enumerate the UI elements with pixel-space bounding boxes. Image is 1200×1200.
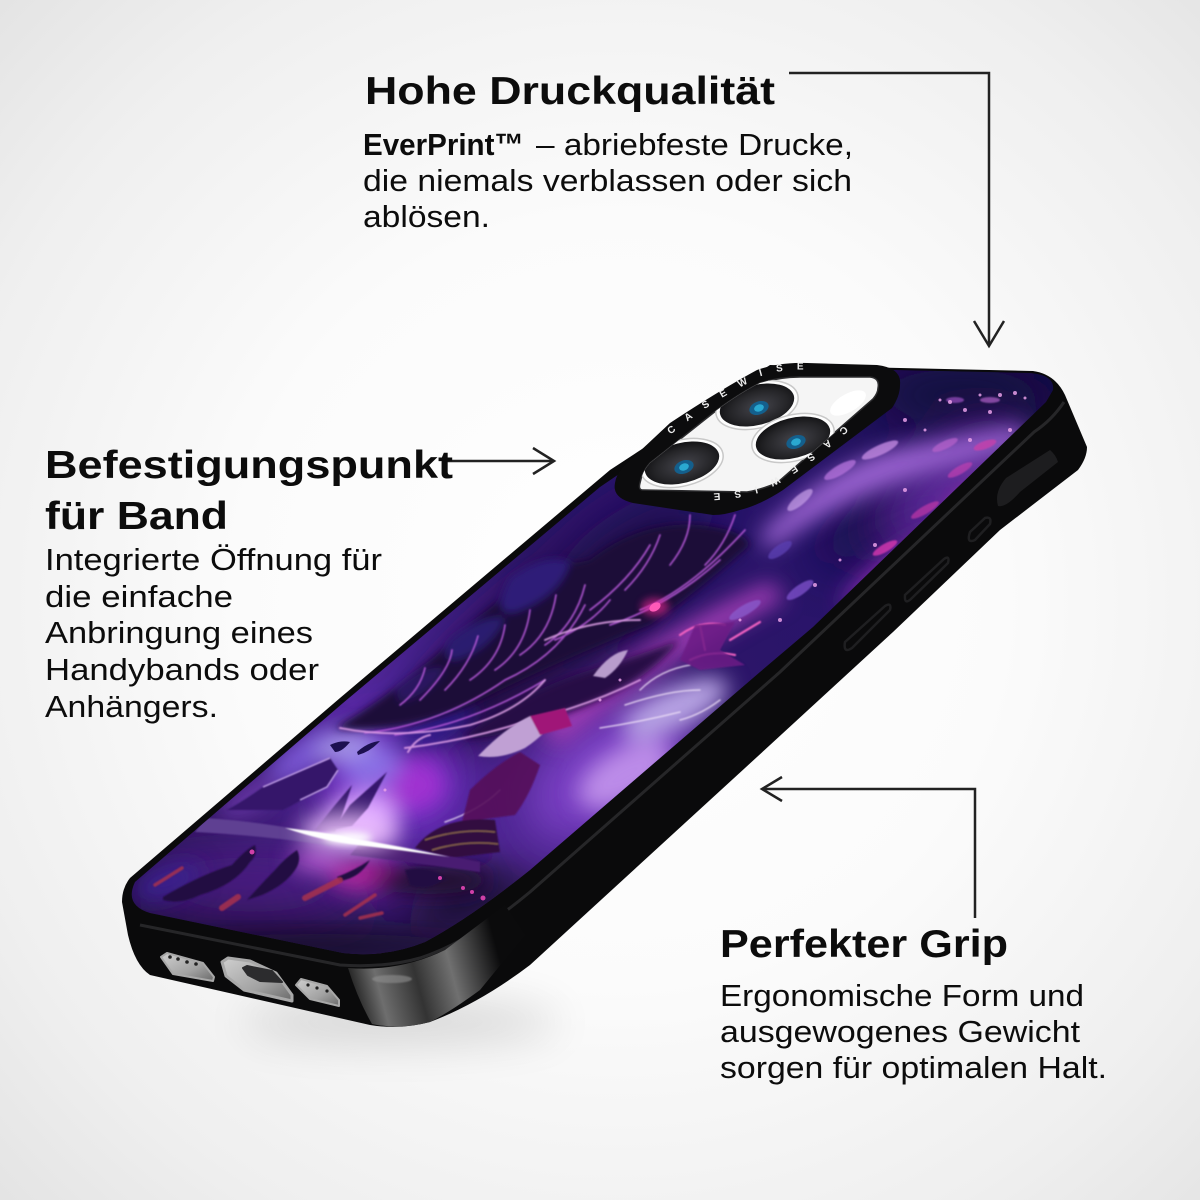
body text: Anhängers.: [45, 689, 218, 724]
arrow: strap point: [445, 448, 554, 474]
dark horizon band: [195, 818, 320, 843]
body text: EverPrint™: [363, 127, 524, 162]
callout: strap attachment: [45, 444, 453, 724]
red accents: [155, 868, 382, 918]
pink eye: [641, 598, 669, 616]
body text: ablösen.: [363, 199, 490, 234]
figure: [415, 650, 628, 858]
dark spires: [315, 772, 387, 832]
arrow: top callout to case: [789, 73, 1004, 346]
pink sparks: [250, 850, 486, 900]
raised rim line: [140, 402, 1064, 966]
arrow: grip: [762, 777, 975, 918]
dragon line work: [340, 515, 760, 822]
phone case: [122, 365, 1087, 1027]
body text: [363, 127, 853, 234]
dark rock: [227, 758, 338, 810]
brand text top: CASEWISE: [668, 362, 804, 434]
speaker grille left: [161, 953, 214, 981]
side switch: [997, 450, 1058, 506]
sunburst: [285, 812, 450, 857]
foreground shadow: [242, 928, 437, 954]
flower: [680, 622, 745, 670]
body text: – abriebfeste Drucke,: [536, 127, 853, 162]
stars: [384, 391, 1026, 792]
opening: [639, 377, 878, 492]
body text: die niemals verblassen oder sich: [363, 163, 852, 198]
lenses inside the opening: [642, 380, 866, 488]
floating shards: [330, 741, 380, 755]
body text: Integrierte Öffnung für: [45, 542, 382, 577]
dark band right of sun: [350, 843, 480, 872]
heading: Befestigungspunkt: [45, 444, 453, 487]
foreground silhouettes: [163, 845, 445, 902]
body text: Anbringung eines: [45, 615, 313, 650]
heading: Hohe Druckqualität: [365, 70, 775, 113]
body text: [720, 978, 1107, 1085]
heading: Perfekter Grip: [720, 923, 1008, 966]
heading: [45, 444, 453, 538]
body text: Ergonomische Form und: [720, 978, 1084, 1013]
flash: [830, 390, 866, 416]
nebula dabs: [727, 397, 1000, 623]
heading: für Band: [45, 495, 228, 538]
speaker grille right: [296, 979, 339, 1006]
case body: [122, 365, 1087, 1027]
dragon body: [335, 524, 750, 738]
body text: die einfache: [45, 579, 233, 614]
bump ring: [615, 363, 900, 515]
body text: [45, 542, 382, 724]
callout: grip: [720, 923, 1107, 1085]
phone drop shadow: [240, 1002, 560, 1042]
body text: ausgewogenes Gewicht: [720, 1014, 1080, 1049]
lens left: [642, 438, 724, 488]
side buttons: [845, 518, 990, 650]
body text: sorgen für optimalen Halt.: [720, 1050, 1107, 1085]
glossy corner: [348, 905, 525, 1027]
artwork base: [132, 370, 1054, 954]
charging port: [222, 958, 292, 1001]
corner highlight: [372, 975, 412, 983]
large colour fields: [110, 369, 1050, 964]
lens top: [715, 380, 799, 430]
callout: print quality: [363, 70, 853, 234]
brand text bottom: CASEWISE: [714, 427, 848, 500]
printed artwork: [132, 363, 1054, 954]
rock edge highlight: [263, 758, 338, 800]
camera bump: [614, 362, 906, 515]
lens right: [751, 412, 835, 464]
body text: Handybands oder: [45, 652, 319, 687]
nebula bands: [129, 425, 1030, 907]
